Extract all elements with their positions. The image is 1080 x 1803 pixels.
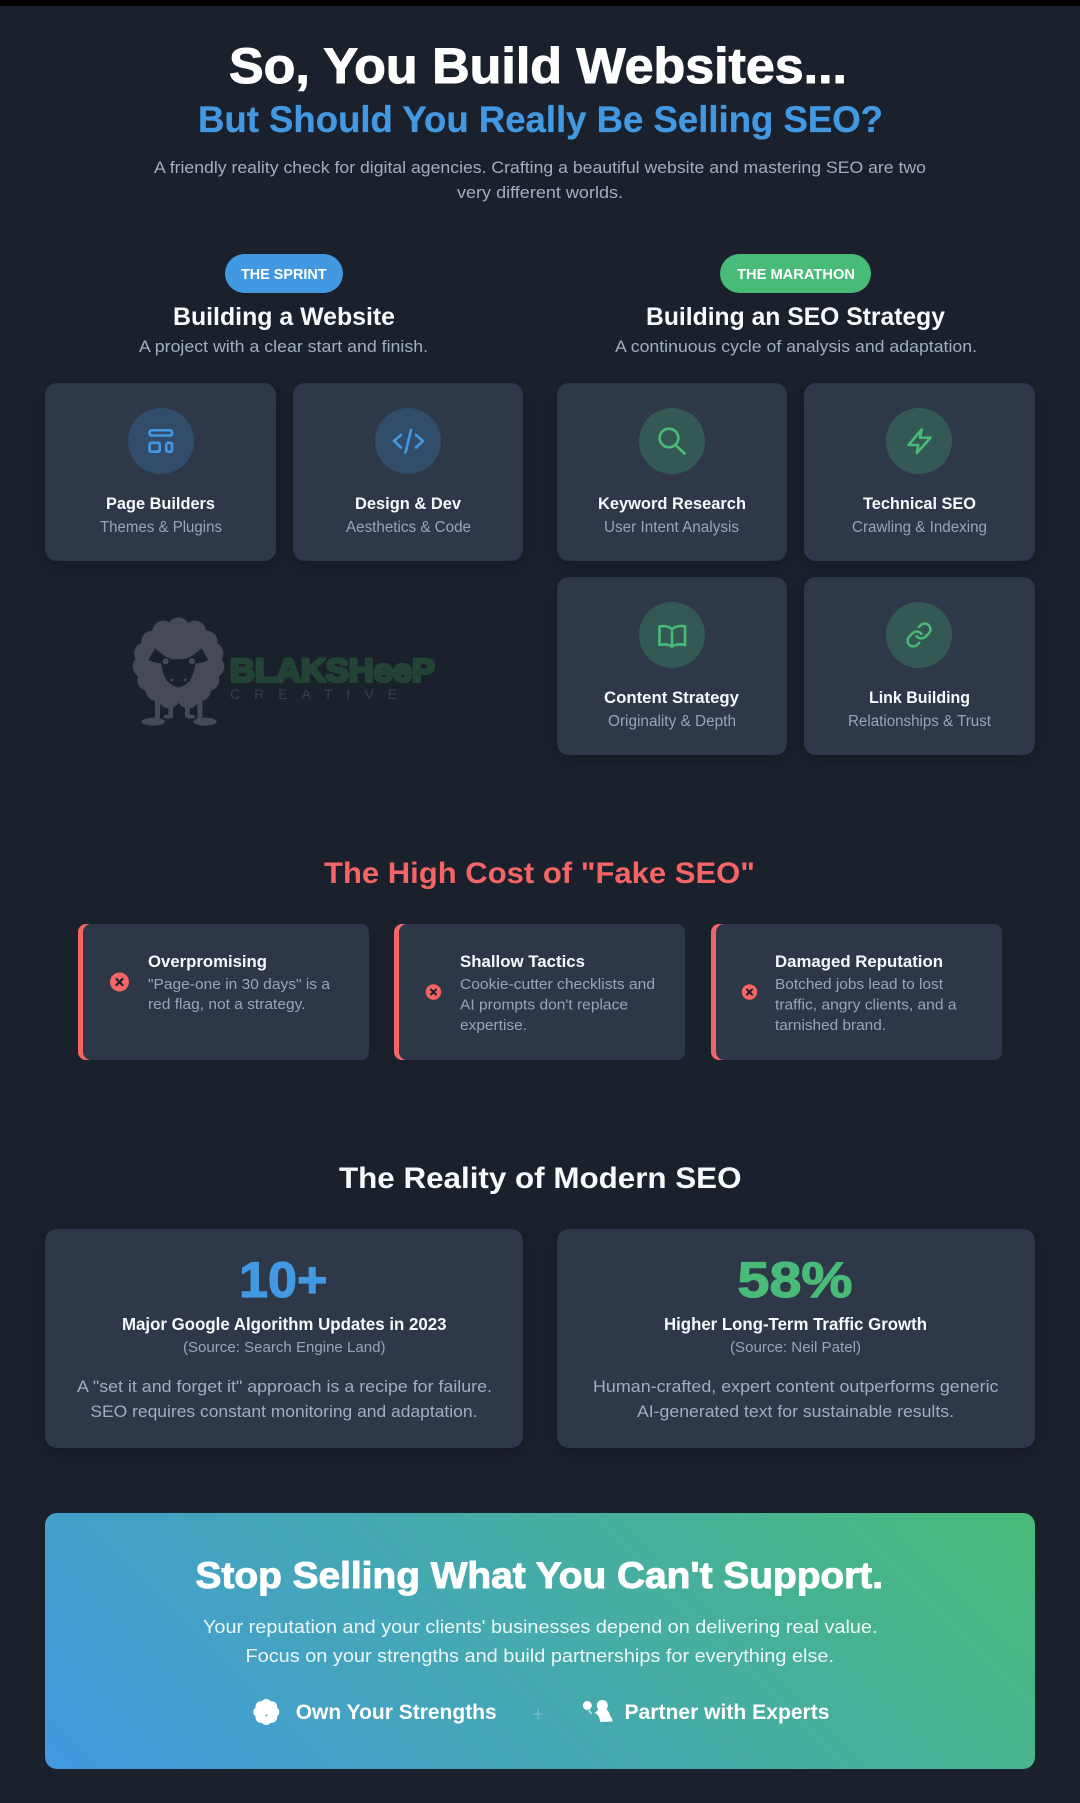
pill: the sprint: THE SPRINT — [241, 267, 327, 283]
logo wordmark: BLAKSHeeP — [230, 652, 435, 688]
panel: overpromising — [78, 924, 369, 1060]
card: technical seo: Technical SEO — [863, 494, 976, 513]
section heading: reality of modern seo: The Reality of Modern SEO — [339, 1162, 742, 1195]
panel: overpromising: red flag, not a strategy. — [148, 996, 306, 1013]
intro text — [154, 158, 926, 202]
column heading: the marathon — [615, 254, 977, 356]
panel: damaged reputation — [711, 924, 1002, 1060]
card: page builders: Page Builders — [106, 494, 215, 513]
panel: damaged reputation: Botched jobs lead to lost — [775, 976, 944, 993]
panel: shallow tactics: Shallow Tactics — [460, 952, 585, 971]
logo: blaksheep creative — [133, 617, 435, 726]
pill: the marathon — [720, 254, 871, 293]
explanation — [593, 1377, 999, 1421]
panel: damaged reputation: Damaged Reputation — [775, 952, 943, 971]
panel: overpromising: "Page-one in 30 days" is a — [148, 976, 331, 993]
stat number: 10+ — [239, 1252, 328, 1308]
card: link building — [804, 577, 1035, 755]
panel: stat 10+ — [45, 1229, 523, 1448]
card: keyword research: User Intent Analysis — [604, 519, 739, 536]
icon: x mark — [110, 972, 129, 992]
explanation: A "set it and forget it" approach is a recipe for failure. — [77, 1377, 492, 1396]
panel: stat 10+: Major Google Algorithm Updates in 2023 — [122, 1314, 447, 1334]
icon: x mark — [742, 984, 757, 1000]
panel: shallow tactics: AI prompts don't replace — [460, 996, 628, 1014]
panel: call to action — [45, 1513, 1035, 1769]
panel: damaged reputation: tarnished brand. — [775, 1017, 886, 1034]
cta text: Focus on your strengths and build partnerships for everything else. — [246, 1646, 834, 1666]
panel: shallow tactics — [394, 924, 685, 1060]
plus sign — [533, 1709, 543, 1719]
icon: link — [908, 624, 930, 646]
card: keyword research: Keyword Research — [598, 494, 746, 513]
header — [154, 38, 926, 202]
card: page builders — [45, 383, 276, 561]
icon: x mark — [426, 984, 441, 1000]
column heading: the sprint — [139, 254, 428, 356]
icon: partners — [583, 1700, 613, 1722]
intro text: A friendly reality check for digital agencies. Crafting a beautiful website and mastering SEO are two — [154, 158, 926, 177]
heading: building a website: Building a Website — [173, 303, 395, 331]
card: content strategy — [557, 577, 787, 755]
explanation: SEO requires constant monitoring and adaptation. — [90, 1402, 477, 1421]
card: link building: Link Building — [869, 688, 970, 707]
icon: search — [660, 429, 684, 454]
section heading: high cost of fake seo: The High Cost of "Fake SEO" — [324, 857, 755, 890]
panel: shallow tactics: expertise. — [460, 1017, 527, 1034]
card: design and dev: Aesthetics & Code — [346, 519, 471, 536]
subtitle: But Should You Really Be Selling SEO? — [198, 99, 883, 140]
card: content strategy: Originality & Depth — [608, 713, 736, 730]
card: content strategy: Content Strategy — [604, 688, 740, 707]
card: design and dev — [293, 383, 523, 561]
stat number: 58% — [738, 1252, 852, 1308]
panel: damaged reputation: traffic, angry clients, and a — [775, 996, 957, 1014]
pill: the sprint — [225, 254, 343, 293]
label: partner with experts: Partner with Experts — [624, 1701, 830, 1724]
card: design and dev: Design & Dev — [355, 494, 462, 513]
pill: the marathon: THE MARATHON — [737, 267, 855, 283]
description: A project with a clear start and finish. — [139, 338, 428, 356]
panel: stat 10+: (Source: Search Engine Land) — [183, 1340, 386, 1356]
panel: stat 58%: (Source: Neil Patel) — [730, 1340, 861, 1356]
explanation: Human-crafted, expert content outperforms generic — [593, 1377, 999, 1396]
panel: shallow tactics: Cookie-cutter checklists and — [460, 976, 655, 993]
cta heading: Stop Selling What You Can't Support. — [196, 1555, 883, 1596]
panel: overpromising: Overpromising — [148, 952, 267, 971]
panel: stat 58%: Higher Long-Term Traffic Growth — [664, 1314, 927, 1334]
explanation — [77, 1377, 492, 1421]
intro text: very different worlds. — [457, 183, 623, 202]
heading: building an seo strategy: Building an SEO Strategy — [646, 303, 945, 331]
icon: sheep — [133, 617, 224, 726]
label: own your strengths: Own Your Strengths — [296, 1701, 497, 1724]
card: technical seo: Crawling & Indexing — [852, 519, 987, 536]
card: link building: Relationships & Trust — [848, 713, 992, 730]
card: technical seo — [804, 383, 1035, 561]
icon: bolt — [908, 430, 930, 453]
icon: layout — [150, 430, 172, 452]
card: keyword research — [557, 383, 787, 561]
cta text — [203, 1617, 878, 1666]
logo tagline: CREATIVE — [230, 686, 397, 702]
panel: stat 58% — [557, 1229, 1035, 1448]
cta text: Your reputation and your clients' businesses depend on delivering real value. — [203, 1617, 878, 1637]
description: A continuous cycle of analysis and adaptation. — [615, 338, 977, 356]
explanation: AI-generated text for sustainable results. — [637, 1402, 954, 1421]
icon: strengths — [253, 1699, 279, 1725]
icon: code — [394, 430, 423, 452]
icon: book — [660, 626, 685, 646]
title: So, You Build Websites... — [229, 38, 847, 94]
card: page builders: Themes & Plugins — [100, 519, 222, 536]
